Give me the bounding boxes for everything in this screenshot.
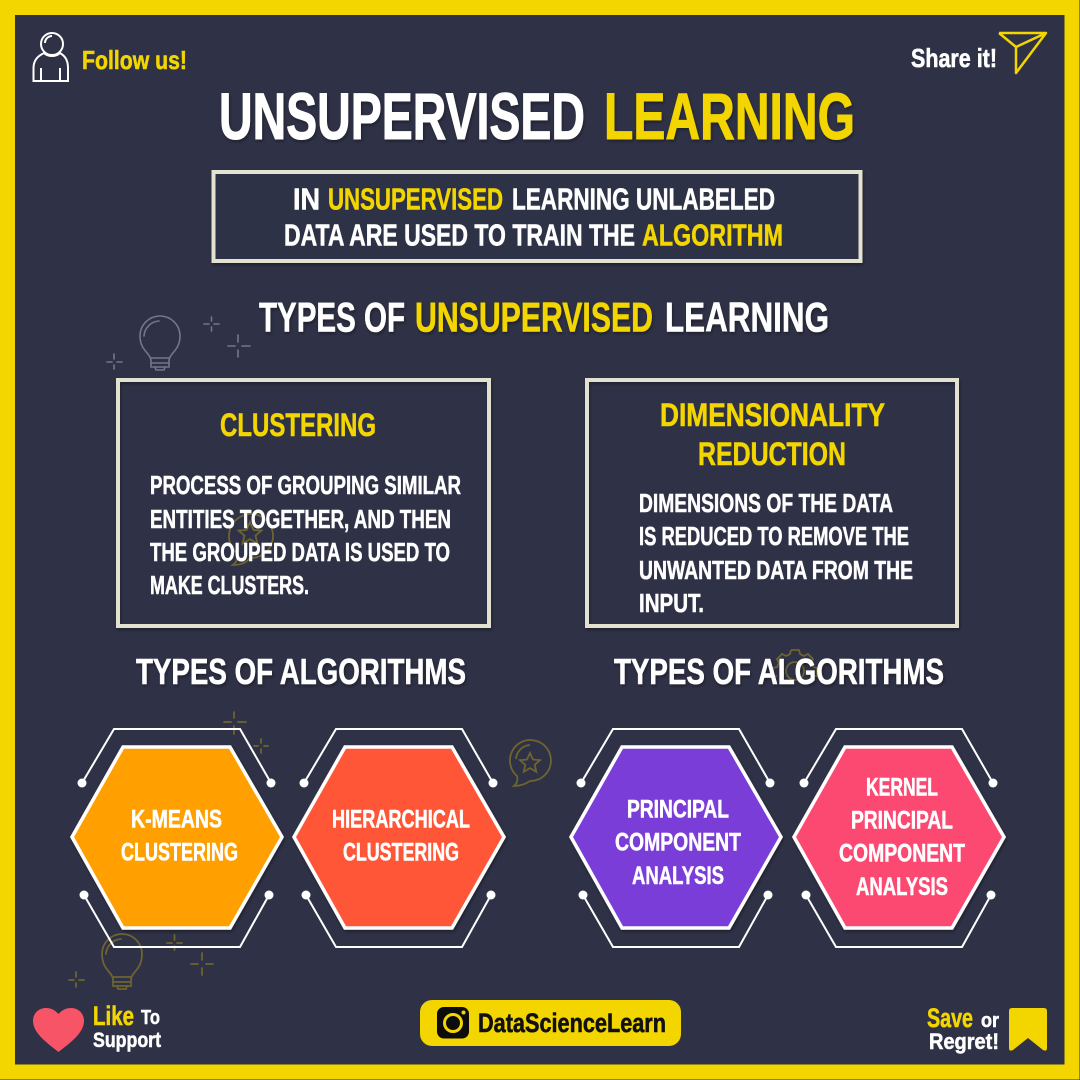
- hierarchical label: CLUSTERING: [343, 838, 459, 866]
- clustering description: ENTITIES TOGETHER, AND THEN: [150, 504, 451, 534]
- dimensionality reduction description: [639, 488, 913, 618]
- definition box: [214, 172, 860, 261]
- dimensionality reduction description: DIMENSIONS OF THE DATA: [639, 488, 893, 518]
- follow us label: Follow us!: [82, 45, 187, 75]
- icon: faint gear behind heading: [773, 650, 817, 680]
- principal component analysis label: COMPONENT: [615, 828, 741, 856]
- handle text: DataScienceLearn: [478, 1008, 666, 1038]
- clustering description: MAKE CLUSTERS.: [150, 570, 309, 600]
- heading: types of unsupervised learning: LEARNING: [665, 294, 829, 340]
- dimensionality reduction description: INPUT.: [639, 588, 704, 618]
- heading: types of algorithms left: TYPES OF ALGORITHMS: [136, 651, 466, 692]
- heading: types of unsupervised learning: [259, 294, 829, 340]
- clustering description: [150, 470, 461, 600]
- icon: person: [34, 33, 68, 81]
- like to support label: To: [141, 1007, 160, 1029]
- clustering heading: CLUSTERING: [220, 407, 376, 443]
- icon: olive light bulb with sparkles: [69, 934, 213, 989]
- panel: dimensionality reduction: [587, 380, 957, 626]
- hexagon: principal component analysis: [571, 729, 781, 947]
- definition text: IN: [293, 182, 320, 216]
- panel: clustering: [118, 380, 489, 626]
- clustering description: THE GROUPED DATA IS USED TO: [150, 537, 450, 567]
- dimensionality reduction heading: [660, 397, 885, 472]
- dimensionality reduction heading: REDUCTION: [698, 436, 846, 472]
- principal component analysis label: [615, 796, 741, 890]
- kernel pca label: COMPONENT: [839, 840, 965, 868]
- k-means label: K-MEANS: [131, 806, 222, 834]
- hierarchical label: [332, 806, 470, 866]
- header: share it: [911, 33, 1046, 73]
- icon: instagram: [437, 1007, 469, 1038]
- footer: instagram handle pill: [420, 1000, 681, 1046]
- like to support label: Support: [93, 1029, 161, 1052]
- dimensionality reduction heading: DIMENSIONALITY: [660, 397, 885, 433]
- header: follow us: [34, 33, 187, 81]
- dimensionality reduction description: IS REDUCED TO REMOVE THE: [639, 521, 909, 551]
- kernel pca label: PRINCIPAL: [851, 806, 953, 834]
- hierarchical label: HIERARCHICAL: [332, 806, 470, 834]
- icon: bookmark: [1009, 1008, 1047, 1051]
- kernel pca label: ANALYSIS: [856, 873, 948, 901]
- icon: olive sparkles by first hexagon: [224, 712, 268, 753]
- title: LEARNING: [604, 79, 855, 153]
- icon: paper plane: [999, 33, 1046, 73]
- definition text: ALGORITHM: [642, 218, 783, 252]
- kernel pca label: KERNEL: [866, 774, 938, 802]
- save or regret label: Save: [927, 1003, 973, 1033]
- k-means label: CLUSTERING: [121, 838, 238, 866]
- icon: grey light bulb: [107, 316, 250, 370]
- definition text: [284, 182, 783, 252]
- decorative icons: [69, 316, 817, 989]
- hexagon: k-means clustering: [72, 729, 282, 947]
- save or regret label: or: [981, 1010, 999, 1032]
- definition text: DATA ARE USED TO TRAIN THE: [284, 218, 635, 252]
- principal component analysis label: ANALYSIS: [632, 862, 724, 890]
- k-means label: [121, 806, 238, 866]
- icon: faint chat bubble with star behind text: [229, 514, 273, 565]
- share it label: Share it!: [911, 43, 997, 73]
- save or regret label: Regret!: [929, 1029, 999, 1054]
- save or regret label: [927, 1003, 999, 1054]
- footer: like to support: [33, 1001, 161, 1052]
- heading: types of unsupervised learning: TYPES OF: [259, 294, 405, 340]
- kernel pca label: [839, 774, 965, 901]
- heading: types of unsupervised learning: UNSUPERVISED: [415, 294, 653, 340]
- hexagon: kernel principal component analysis: [794, 729, 1004, 947]
- like to support label: [93, 1001, 161, 1052]
- like to support label: Like: [93, 1001, 134, 1031]
- clustering description: PROCESS OF GROUPING SIMILAR: [150, 470, 461, 500]
- dimensionality reduction description: UNWANTED DATA FROM THE: [639, 555, 913, 585]
- definition text: UNSUPERVISED: [328, 182, 503, 216]
- hexagon: hierarchical clustering: [294, 729, 504, 947]
- footer: save or regret: [927, 1003, 1047, 1054]
- icon: olive chat bubble with star: [510, 740, 551, 786]
- icon: heart: [33, 1008, 84, 1052]
- definition text: LEARNING UNLABELED: [512, 182, 775, 216]
- principal component analysis label: PRINCIPAL: [627, 796, 729, 824]
- heading: types of algorithms right: TYPES OF ALGORITHMS: [614, 651, 944, 692]
- title: UNSUPERVISED: [219, 79, 585, 153]
